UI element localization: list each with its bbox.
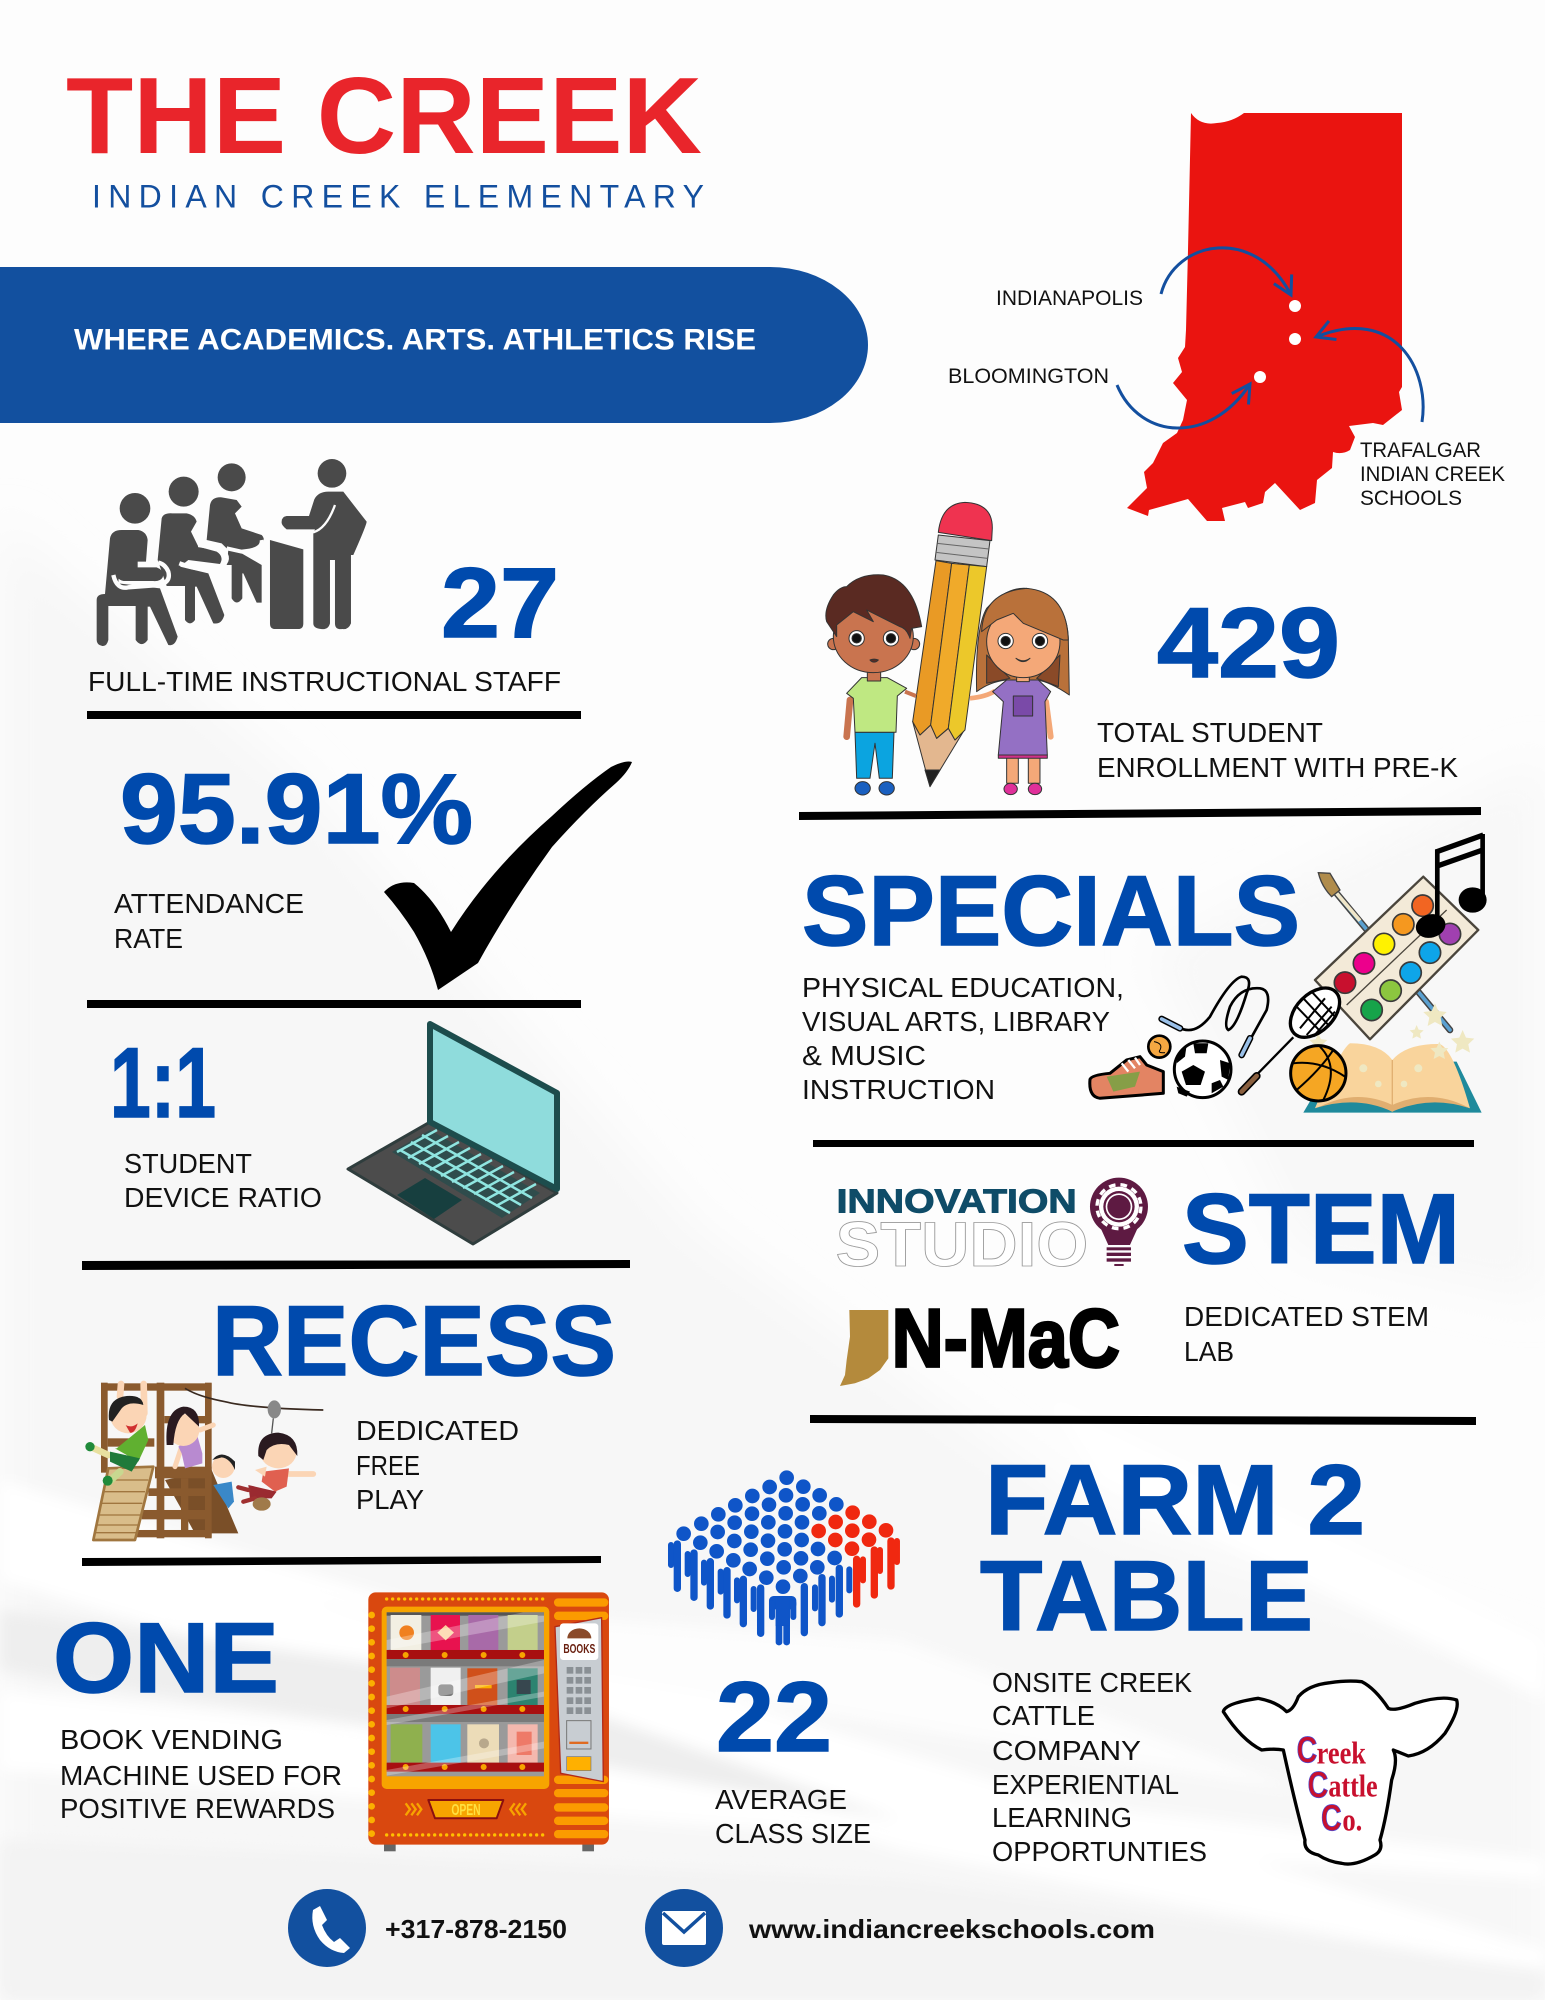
logo: Creek Cattle Co.: attle: [1328, 1768, 1378, 1804]
icon: check mark: [384, 762, 632, 990]
logo: Creek Cattle Co.: [1223, 1681, 1457, 1864]
divider: [87, 711, 581, 719]
label: cattle company: CATTLE: [992, 1700, 1095, 1731]
logo: Innovation Studio: INNOVATION: [837, 1183, 1077, 1220]
label: class size: [715, 1784, 871, 1849]
map of Indiana: [948, 113, 1505, 521]
label: specials list: PHYSICAL EDUCATION,: [802, 972, 1124, 1003]
website: www.indiancreekschools.com: [748, 1914, 1155, 1944]
label: attendance rate: ATTENDANCE: [114, 888, 304, 919]
label: free play: [356, 1415, 519, 1515]
heading: farm 2 table: FARM 2: [985, 1444, 1365, 1555]
label: vending machine: BOOK VENDING: [60, 1724, 283, 1755]
icon: crowd of students: [671, 1478, 897, 1645]
label: instructional staff: FULL-TIME INSTRUCTIONAL STAFF: [88, 666, 561, 697]
label: cattle company: EXPERIENTIAL: [992, 1769, 1179, 1800]
stat: device ratio: 1:1: [110, 1027, 216, 1138]
map of Indiana: SCHOOLS: [1360, 487, 1462, 510]
label: free play: DEDICATED: [356, 1415, 519, 1446]
logo: Creek Cattle Co.: o.: [1342, 1802, 1362, 1838]
divider: [810, 1415, 1476, 1425]
map of Indiana: BLOOMINGTON: [948, 365, 1109, 388]
label: cattle company: LEARNING: [992, 1802, 1132, 1833]
map of Indiana: INDIAN CREEK: [1360, 463, 1505, 486]
stat: 27: 27: [441, 547, 559, 658]
label: attendance rate: [114, 888, 304, 954]
illustration: children with pencil: [826, 502, 1069, 795]
label: enrollment: TOTAL STUDENT: [1097, 717, 1323, 748]
girl: [970, 588, 1069, 795]
icon: staff people: [97, 459, 367, 646]
map of Indiana: TRAFALGAR: [1360, 439, 1481, 462]
illustration: book vending machine: OPEN: [451, 1802, 481, 1819]
label: free play: FREE: [356, 1450, 420, 1481]
label: enrollment: [1097, 717, 1458, 783]
subtitle: INDIAN CREEK ELEMENTARY: [92, 178, 704, 214]
logo: Innovation Studio: STUDIO: [836, 1210, 1088, 1280]
label: class size: CLASS SIZE: [715, 1818, 871, 1849]
stat: one: ONE: [53, 1602, 279, 1713]
icon: phone: [288, 1889, 366, 1967]
heading: recess: RECESS: [212, 1285, 616, 1396]
label: specials list: & MUSIC: [802, 1040, 926, 1071]
stat: 22: 22: [716, 1661, 832, 1772]
label: specials list: [802, 972, 1124, 1105]
title: THE CREEK: [66, 55, 702, 177]
illustration: book vending machine: BOOKS: [563, 1641, 595, 1656]
label: vending machine: POSITIVE REWARDS: [60, 1793, 335, 1824]
divider: [87, 1000, 581, 1008]
illustration: book vending machine: [368, 1592, 609, 1851]
label: device ratio: [124, 1148, 322, 1213]
label: cattle company: COMPANY: [992, 1735, 1141, 1766]
label: class size: AVERAGE: [715, 1784, 847, 1815]
map of Indiana: INDIANAPOLIS: [996, 287, 1143, 310]
label: device ratio: DEVICE RATIO: [124, 1182, 322, 1213]
label: free play: PLAY: [356, 1484, 424, 1515]
icon: laptop: [348, 1024, 557, 1244]
logo: Creek Cattle Co.: C: [1321, 1798, 1342, 1839]
stat: 429: 429: [1157, 587, 1340, 698]
logo: Innovation Studio: [836, 1178, 1148, 1280]
label: device ratio: STUDENT: [124, 1148, 252, 1179]
label: vending machine: [60, 1724, 342, 1824]
label: specials list: INSTRUCTION: [802, 1074, 995, 1105]
label: cattle company: ONSITE CREEK: [992, 1667, 1192, 1698]
label: vending machine: MACHINE USED FOR: [60, 1760, 342, 1791]
label: attendance rate: RATE: [114, 923, 183, 954]
phone number: +317-878-2150: [385, 1914, 567, 1944]
label: cattle company: OPPORTUNTIES: [992, 1836, 1207, 1867]
label: stem lab: LAB: [1184, 1336, 1234, 1367]
label: stem lab: DEDICATED STEM: [1184, 1301, 1429, 1332]
heading: farm 2 table: TABLE: [980, 1540, 1313, 1651]
logo: Creek Cattle Co.: reek: [1317, 1734, 1366, 1770]
logo: Creek Cattle Co.: C: [1297, 1730, 1317, 1771]
pencil: [913, 502, 992, 787]
heading: stem: STEM: [1182, 1173, 1460, 1284]
icon: email: [645, 1889, 723, 1967]
banner: [0, 267, 868, 423]
illustration: playset with children: [85, 1383, 323, 1540]
divider: [799, 807, 1481, 820]
label: cattle company: [992, 1667, 1207, 1867]
divider: [82, 1556, 601, 1566]
divider: [82, 1260, 630, 1270]
divider: [813, 1140, 1474, 1147]
stat: attendance: 95.91%: [120, 753, 473, 864]
label: stem lab: [1184, 1301, 1429, 1367]
logo: N-MaC: N-MaC: [892, 1292, 1120, 1385]
banner: WHERE ACADEMICS. ARTS. ATHLETICS RISE: [74, 324, 756, 356]
illustration: specials icons: [1090, 834, 1487, 1113]
label: specials list: VISUAL ARTS, LIBRARY: [802, 1006, 1110, 1037]
boy: [826, 575, 922, 795]
heading: specials: SPECIALS: [802, 855, 1300, 966]
label: enrollment: ENROLLMENT WITH PRE-K: [1097, 752, 1458, 783]
heading: farm 2 table: [980, 1444, 1365, 1651]
logo: Creek Cattle Co.: C: [1308, 1764, 1328, 1805]
